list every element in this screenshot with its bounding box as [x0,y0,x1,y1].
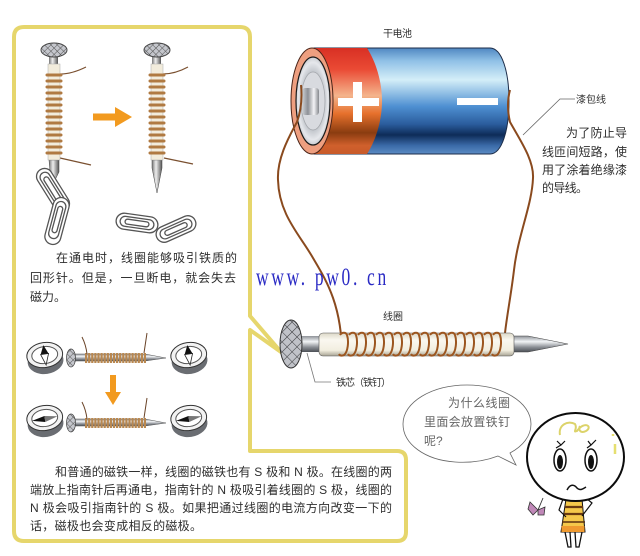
core [48,64,60,160]
arrow: orange right [93,107,132,127]
hair curl [560,423,589,435]
text: lower explanation: 和普通的磁铁一样，线圈的磁铁也有 S 极和 N 极。在线圈的两 [55,464,392,479]
coil [150,75,164,153]
minus sign [457,98,498,105]
nail head [280,320,302,368]
nail tip [152,160,162,193]
cartoon girl [527,413,624,547]
paper clips on table [115,212,198,245]
small nail [66,333,166,367]
bubble text [424,396,510,448]
terminal [301,72,325,130]
nail neck [49,55,58,66]
text: lower explanation: 端放上指南针后再通电，指南针的 N 极吸引着线圈的 S 极，线圈的 [30,482,392,497]
compass pair, bottom row [25,398,209,439]
text: enameled wire note: 用了涂着绝缘漆 [542,162,627,177]
text: enameled wire note [542,125,627,195]
text: upper explanation [30,250,237,304]
main nail with coil [280,320,568,368]
label: battery: 干电池 [383,27,412,40]
bow [528,498,545,515]
coil [47,75,61,153]
wire: left lead [278,85,342,356]
text: enameled wire note: 的导线。 [542,180,588,195]
label: enameled wire [523,93,606,135]
left eye [554,441,566,471]
compass right [169,403,209,439]
speech bubble [403,385,531,465]
watermark: www. pw0. cn [256,263,386,291]
bubble text: 为什么线圈 [448,396,510,410]
panel: yellow callout frame [14,27,406,541]
right eye [585,440,597,471]
text: upper explanation: 在通电时，线圈能够吸引铁质的 [56,250,237,265]
coil windings [339,333,501,356]
nail tip [49,160,59,180]
label: coil: 线圈 [383,310,403,323]
compass pair, top row [25,333,209,376]
dress [561,499,585,532]
core [151,64,163,160]
plus sign [338,82,379,122]
arms [559,498,592,517]
mouth [567,485,586,490]
wires [163,67,193,164]
nail head [41,43,67,57]
insulating core [319,333,514,356]
compass left [25,403,65,439]
wires [60,67,91,165]
compass left [25,340,65,376]
paper clips hanging [33,165,73,246]
arrow: orange down [105,375,121,405]
text: enameled wire note: 线匝间短路，使 [542,144,627,159]
bubble text: 呢? [424,434,443,448]
text: lower explanation: 话，磁极也会变成相反的磁极。 [30,518,202,533]
nail head [144,43,170,57]
small nail [66,398,166,432]
text: lower explanation [30,464,392,533]
clip three [115,212,159,234]
highlight [613,434,615,454]
battery [291,48,509,154]
label: iron core: 铁芯（铁钉） [336,376,391,389]
label: iron core [307,353,391,389]
nail neck [152,55,161,66]
clip two [43,196,71,246]
text: enameled wire note: 为了防止导 [566,125,627,140]
bubble outline [403,385,531,465]
nail with paper clips attached [41,43,91,180]
compass right [169,340,209,376]
end cap metal [296,57,330,145]
end cap rim [291,48,333,154]
bubble text: 里面会放置铁钉 [424,414,510,429]
clip four [154,213,198,245]
shaft [300,336,328,352]
head [527,413,624,501]
wire: right lead [505,90,533,333]
text: upper explanation: 磁力。 [30,289,66,304]
clip one [33,165,73,215]
nail without current [144,43,193,193]
blue body [314,48,509,154]
text: upper explanation: 回形针。但是，一旦断电，就会失去 [30,270,236,285]
nail tip [513,336,568,352]
legs [565,532,582,547]
label: enameled wire: 漆包线 [576,93,606,106]
red band [314,48,382,154]
text: lower explanation: N 极会吸引指南针的 S 极。如果把通过线圈的电流方向改变一下的 [30,500,392,515]
